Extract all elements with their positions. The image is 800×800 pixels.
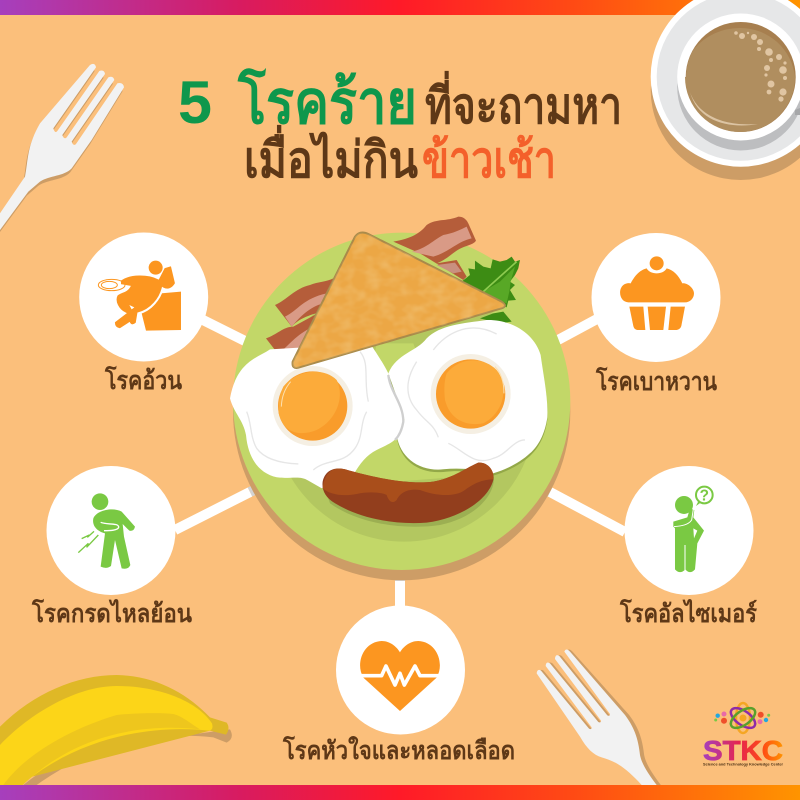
illustration: fork top left <box>0 64 124 234</box>
title <box>178 67 622 188</box>
bacon strips <box>266 217 476 367</box>
title: โรคร้าย <box>237 67 417 136</box>
icon: obese man on a box <box>98 261 181 331</box>
label: โรคเบาหวาน <box>595 366 717 396</box>
connector lines <box>175 319 625 606</box>
title: ข้าวเช้า <box>422 132 556 188</box>
left egg <box>230 343 405 488</box>
illustration: breakfast plate face <box>230 217 570 580</box>
panel: alzheimer <box>619 466 757 628</box>
label: โรคหัวใจและหลอดเลือด <box>282 735 515 765</box>
illustration: fork bottom right <box>537 649 661 785</box>
icon: thinking man <box>673 487 713 573</box>
lettuce <box>462 257 520 323</box>
label: โรคอ้วน <box>104 365 182 395</box>
bottom gradient bar <box>0 785 800 800</box>
plate <box>233 233 570 580</box>
illustration: banana <box>0 675 232 785</box>
title: เมื่อไม่กิน <box>244 125 418 188</box>
illustration: coffee cup <box>651 0 800 180</box>
panel: diabetes <box>592 233 720 396</box>
logo mark: atom <box>728 703 758 733</box>
icon: man with reflux <box>78 493 135 569</box>
title: ที่จะถามหา <box>425 71 622 134</box>
right egg <box>388 320 547 476</box>
top gradient bar <box>0 0 800 15</box>
logo wordmark: STKC <box>703 735 783 766</box>
sausage <box>322 463 494 527</box>
panel: obesity <box>79 232 208 395</box>
title: 5 <box>178 69 212 136</box>
icon: heart with pulse <box>359 641 441 711</box>
icon: thinking man: ? <box>700 488 709 505</box>
panel: acid reflux <box>31 466 192 628</box>
toast <box>287 230 510 370</box>
label: โรคกรดไหลย้อน <box>31 598 192 628</box>
logo tagline: Science and Technology Knowledge Center <box>703 762 783 766</box>
icon: cupcake <box>620 256 694 330</box>
panel: heart disease <box>282 606 515 765</box>
logo: STKC <box>703 703 783 766</box>
label: โรคอัลไซเมอร์ <box>619 598 757 628</box>
